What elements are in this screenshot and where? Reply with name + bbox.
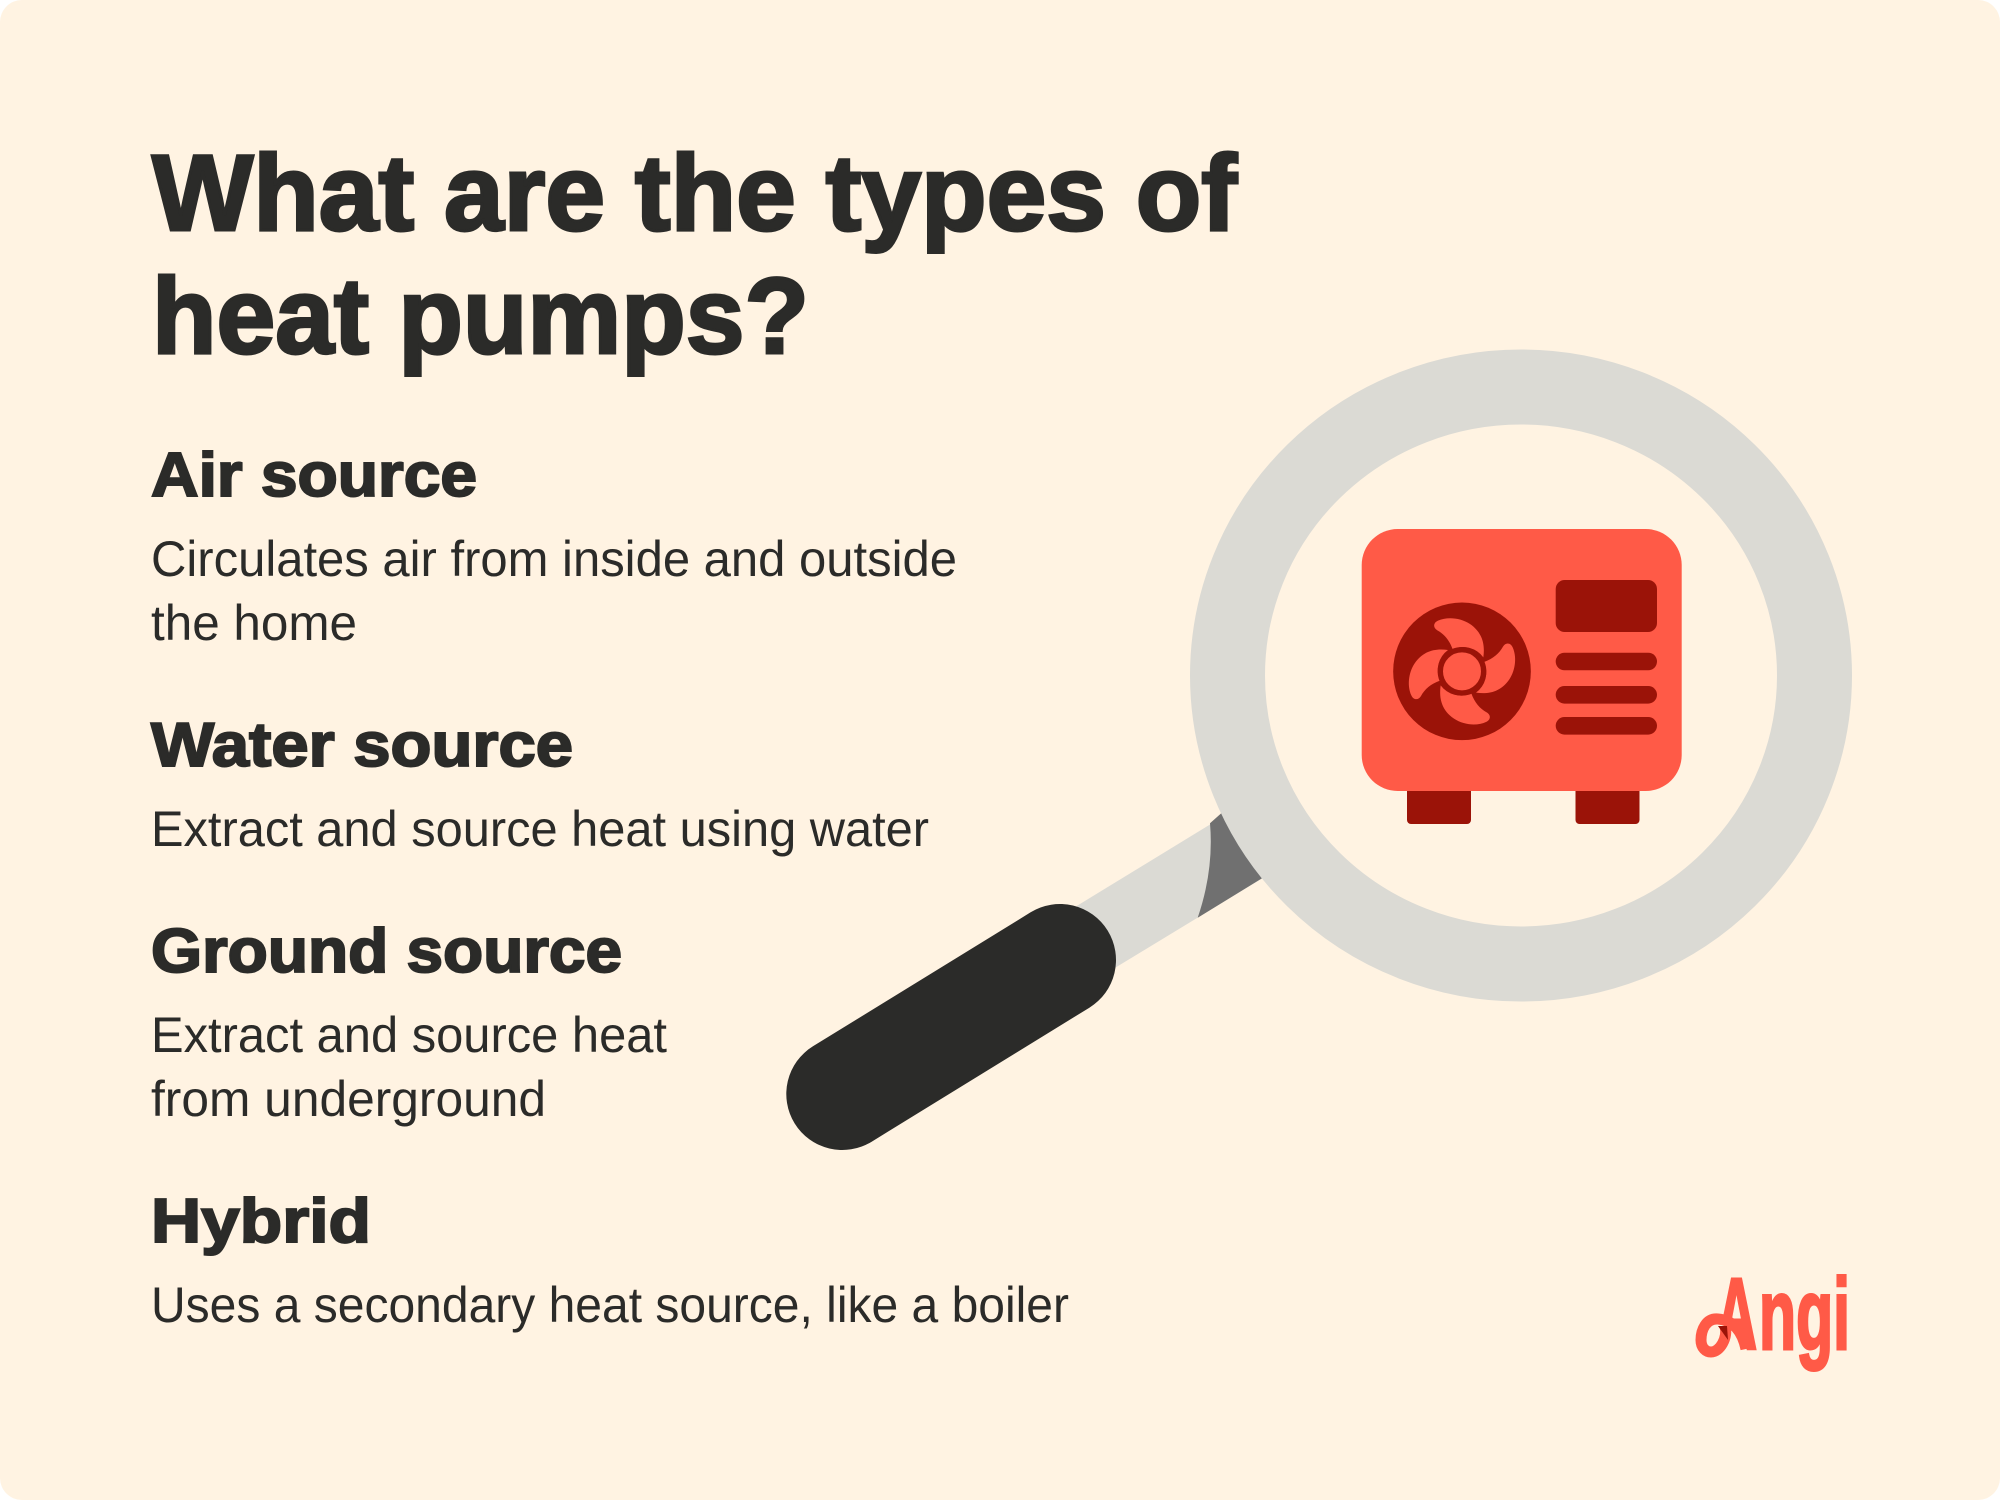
magnifier lens ring xyxy=(1228,387,1814,964)
section: air source: Air source xyxy=(151,441,477,510)
icon: heat pump unit xyxy=(1362,529,1682,824)
section: ground source: Ground source xyxy=(151,917,622,986)
unit feet xyxy=(1407,780,1640,824)
logo: Angi: ngi xyxy=(1759,1259,1850,1371)
magnifying glass xyxy=(842,387,1814,1094)
section: air source xyxy=(151,441,957,651)
section: water source: Extract and source heat using water xyxy=(151,801,929,857)
fan xyxy=(1393,602,1531,740)
magnifier neck shadow xyxy=(1198,770,1300,918)
magnifier neck xyxy=(1077,770,1340,967)
section: ground source xyxy=(151,917,667,1127)
section: water source xyxy=(151,711,929,857)
section: air source: Circulates air from inside and outside xyxy=(151,531,957,587)
section: hybrid xyxy=(151,1187,1069,1333)
logo: Angi xyxy=(1701,1259,1850,1371)
section: hybrid: Uses a secondary heat source, like a boiler xyxy=(151,1277,1069,1333)
section: air source: the home xyxy=(151,595,357,651)
section: ground source: from underground xyxy=(151,1071,546,1127)
unit body xyxy=(1362,529,1682,791)
section: water source: Water source xyxy=(151,711,573,780)
magnifier handle xyxy=(842,960,1060,1094)
title: What are the types of xyxy=(152,132,1238,253)
title xyxy=(152,132,1238,376)
section: hybrid: Hybrid xyxy=(151,1187,371,1256)
section: ground source: Extract and source heat xyxy=(151,1007,667,1063)
unit vents xyxy=(1556,653,1657,735)
title: heat pumps? xyxy=(152,255,809,376)
logo: Angi: A xyxy=(1716,1259,1757,1371)
unit display panel xyxy=(1556,580,1657,632)
